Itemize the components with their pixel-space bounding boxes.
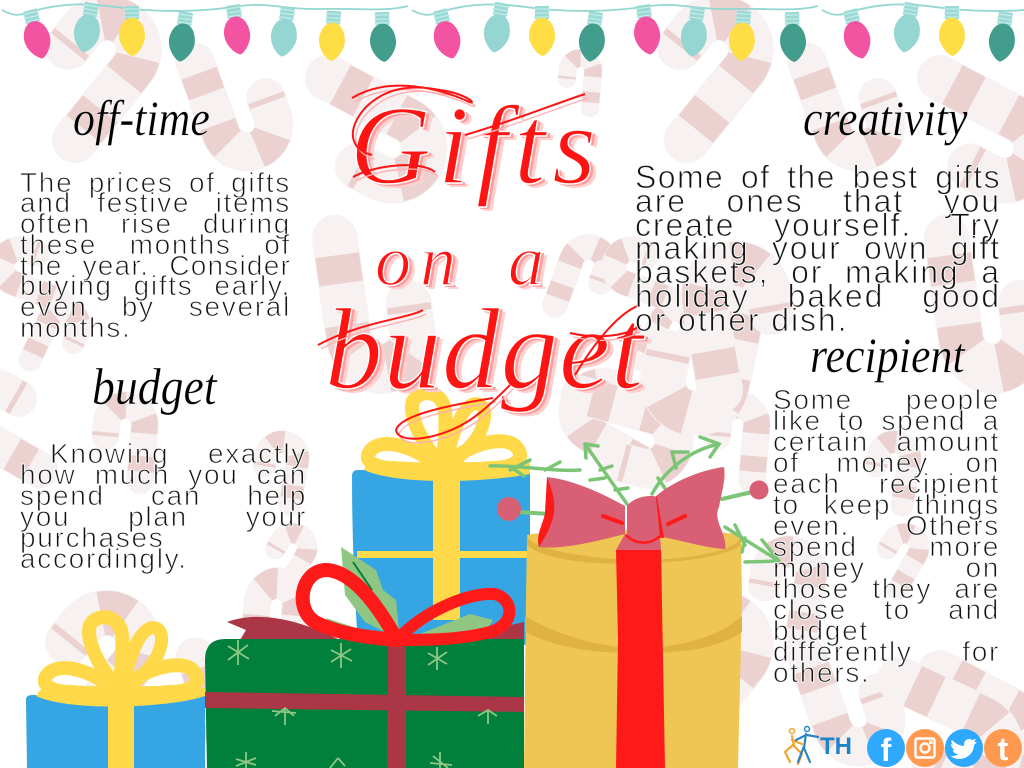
social icon: facebook — [867, 729, 905, 767]
text block: recipient: like to spend a — [773, 405, 1000, 436]
text block: recipient: money on — [773, 552, 1000, 583]
text block: recipient: certain amount — [773, 426, 1000, 457]
text block: recipient: budget — [773, 615, 869, 646]
heading: off-time: off-time — [73, 90, 210, 146]
text block: off-time: these months of — [20, 229, 291, 260]
heading: recipient: recipient — [810, 327, 965, 383]
text block: recipient: differently for — [773, 636, 1000, 667]
text block: recipient: those they are — [773, 573, 1000, 604]
text block: budget: purchases — [20, 522, 164, 552]
text block: recipient: close to and — [773, 594, 1000, 625]
social icon: instagram — [906, 729, 944, 767]
social icon: twitter — [945, 729, 983, 767]
social icon: facebook: f — [881, 732, 892, 767]
text block: creativity: Some of the best gifts — [635, 159, 1001, 195]
text block: creativity: create yourself. Try — [635, 207, 1001, 243]
text block: recipient: each recipient — [773, 468, 1000, 499]
logo: TH — [784, 726, 852, 766]
text block: creativity: or other dish. — [635, 302, 848, 338]
text block: creativity — [635, 159, 1001, 338]
title: Gifts on a budget — [325, 84, 652, 416]
text block: off-time: and festive items — [20, 187, 291, 218]
title line: on a: on a — [375, 221, 553, 301]
text block: budget: spend can help — [20, 480, 307, 510]
text block: off-time — [20, 166, 291, 343]
text block: recipient: Some people — [773, 384, 1000, 415]
text block: recipient: of money on — [773, 447, 1000, 478]
text block: budget: you plan your — [20, 500, 307, 532]
string lights — [2, 2, 1024, 62]
title line: Gifts: Gifts — [350, 84, 603, 208]
text block: recipient — [772, 384, 1000, 688]
text block: creativity: holiday baked good — [635, 278, 1001, 314]
gift: green box with red bow — [205, 547, 524, 768]
text block: creativity: making your own gift — [635, 230, 1001, 266]
heading: budget: budget — [92, 359, 217, 416]
text block: creativity: are ones that you — [635, 183, 1001, 219]
heading: creativity: creativity — [803, 90, 968, 146]
text block: recipient: others. — [773, 657, 870, 688]
social icon: tumblr: t — [998, 731, 1009, 767]
social icon: tumblr — [984, 729, 1022, 767]
text block: off-time: even by several — [20, 291, 291, 322]
text block: recipient: to keep things — [773, 489, 1000, 520]
text block: budget: accordingly. — [20, 542, 188, 574]
text block: recipient: even. Others — [773, 510, 1000, 541]
text block: recipient: spend more — [773, 531, 1000, 562]
gift: blue box back with yellow bow — [352, 393, 530, 645]
text block: off-time: months. — [20, 312, 132, 343]
text block: off-time: buying gifts early, — [20, 270, 291, 301]
logo: TH: TH — [820, 733, 852, 760]
text block: budget — [20, 438, 307, 574]
gift: small blue box with yellow bow — [26, 617, 205, 768]
text block: budget: Knowing exactly — [50, 438, 307, 468]
text block: creativity: baskets, or making a — [635, 254, 1001, 290]
gift: yellow cylinder box with pink bow — [490, 437, 779, 768]
title line: budget: budget — [325, 286, 644, 413]
text block: off-time: often rise during — [20, 208, 291, 239]
text block: off-time: the year. Consider — [20, 250, 291, 281]
text block: off-time: The prices of gifts — [20, 166, 291, 198]
text block: budget: how much you can — [20, 458, 307, 490]
